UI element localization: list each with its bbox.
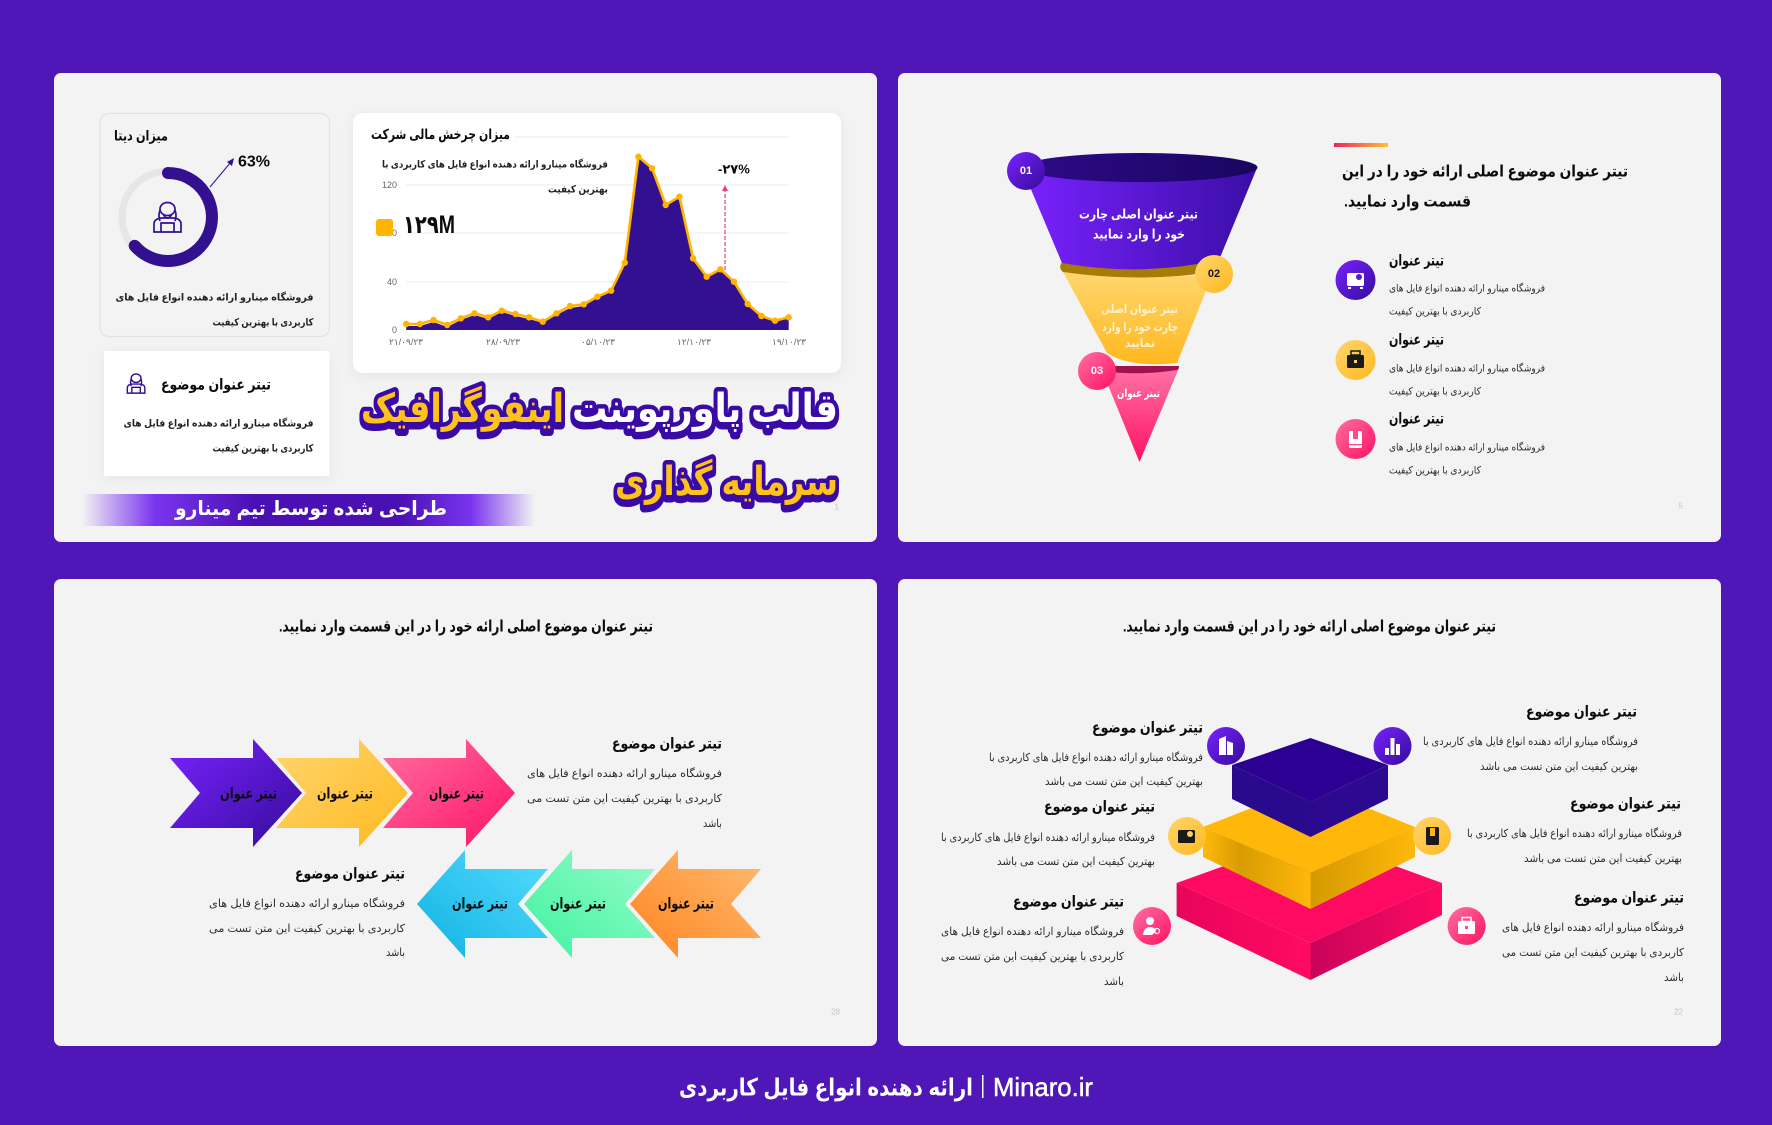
panel: layered blocks slide — [898, 579, 1721, 1046]
arrow: orange — [630, 850, 761, 958]
badge 02 — [1195, 255, 1233, 293]
line series with markers — [403, 154, 792, 328]
text block: right — [527, 736, 723, 830]
list item 1: فروشگاه مینارو ارائه دهنده انواع فایل های — [1389, 282, 1545, 294]
layer: purple — [1232, 738, 1388, 837]
text block: bottom right: تیتر عنوان موضوع — [1574, 890, 1684, 906]
funnel chart — [1007, 152, 1258, 462]
list item 2 — [1336, 332, 1545, 398]
arrow: pink: تیتر عنوان — [429, 786, 484, 802]
text block: top left: تیتر عنوان موضوع — [1092, 720, 1203, 736]
panel: financial dashboard slide — [54, 73, 877, 542]
change label: -۲۷% — [718, 162, 750, 176]
funnel section 3 — [1101, 366, 1179, 462]
text block: middle left: فروشگاه مینارو ارائه دهنده انواع فایل های کاربردی با — [941, 831, 1155, 844]
donut chart 63% — [122, 171, 214, 263]
list item 3: کاربردی با بهترین کیفیت — [1389, 466, 1481, 476]
y axis labels: 0 — [392, 325, 397, 335]
text block: middle left: تیتر عنوان موضوع — [1044, 798, 1155, 816]
text block: right: فروشگاه مینارو ارائه دهنده انواع فایل های — [527, 767, 722, 780]
list item 3: تیتر عنوان — [1389, 410, 1444, 428]
x axis labels: ۱۲/۱۰/۲۳ — [677, 337, 711, 347]
y axis labels: 120 — [382, 180, 397, 190]
text block: middle left: بهترین کیفیت این متن تست می باشد — [997, 856, 1155, 868]
text block: top left: بهترین کیفیت این متن تست می باشد — [1045, 776, 1203, 788]
icon: bar chart — [1374, 727, 1412, 765]
x axis labels — [389, 337, 806, 347]
card: data donut: میزان دیتا — [114, 128, 168, 144]
arrow: yellow: تیتر عنوان — [317, 786, 373, 802]
badge 03: 03 — [1091, 365, 1103, 377]
accent bar — [1334, 143, 1388, 147]
text block: left: تیتر عنوان موضوع — [295, 866, 405, 882]
funnel section 2: نمایید — [1125, 336, 1155, 350]
x axis labels: ۱۹/۱۰/۲۳ — [772, 337, 806, 347]
funnel section 1: تیتر عنوان اصلی چارت — [1079, 206, 1198, 222]
footer: Minaro.ir — [993, 1072, 1093, 1102]
text block: right: کاربردی با بهترین کیفیت این متن تست می — [527, 793, 723, 805]
funnel section 2: تیتر عنوان اصلی — [1101, 302, 1178, 317]
card: area chart: میزان چرخش مالی شرکت — [371, 126, 510, 143]
x axis labels: ۲۸/۰۹/۲۳ — [486, 337, 520, 347]
text block: top left: فروشگاه مینارو ارائه دهنده انواع فایل های کاربردی با — [989, 751, 1203, 764]
list item 3 — [1336, 410, 1545, 476]
card: topic — [104, 351, 330, 476]
arrow: green: تیتر عنوان — [550, 896, 606, 912]
text block: right: باشد — [703, 818, 722, 830]
chart description: فروشگاه مینارو ارائه دهنده انواع فایل های کاربردی با — [382, 158, 608, 170]
chart description: بهترین کیفیت — [548, 184, 608, 196]
main title: سرمایه گذاری — [615, 458, 838, 505]
arrow to value — [210, 158, 234, 187]
funnel section 1: خود را وارد نمایید — [1093, 226, 1185, 242]
text block: top right — [1423, 704, 1638, 773]
card: data donut — [100, 114, 330, 336]
dashed red arrow — [722, 185, 728, 270]
x axis labels: ۲۱/۰۹/۲۳ — [389, 337, 423, 347]
badge 02: 02 — [1208, 268, 1220, 280]
page number: 5 — [1679, 502, 1684, 510]
arrow: orange: تیتر عنوان — [658, 896, 714, 912]
text block: right: تیتر عنوان موضوع — [612, 736, 722, 752]
description — [116, 290, 314, 328]
text block: left: باشد — [386, 947, 405, 959]
text block: left: فروشگاه مینارو ارائه دهنده انواع فایل های — [209, 897, 405, 910]
text block: top left — [989, 720, 1203, 788]
icon: book — [1413, 817, 1451, 855]
page number: 1 — [835, 502, 840, 512]
badge 03 — [1078, 352, 1116, 390]
badge 01: 01 — [1020, 165, 1032, 177]
description — [124, 416, 314, 454]
page number: 22 — [1674, 1008, 1684, 1016]
x axis labels: ۰۵/۱۰/۲۳ — [581, 337, 615, 347]
text block: middle right — [1467, 796, 1682, 865]
funnel section 3: تیتر عنوان — [1117, 388, 1160, 400]
y axis labels — [382, 180, 397, 335]
text block: bottom left: باشد — [1104, 976, 1124, 988]
card: topic: تیتر عنوان موضوع — [161, 376, 271, 394]
list item 1: کاربردی با بهترین کیفیت — [1389, 306, 1481, 318]
card: area chart — [353, 113, 841, 373]
value 63%: 63% — [238, 154, 270, 170]
text block: middle right: فروشگاه مینارو ارائه دهنده انواع فایل های کاربردی با — [1467, 827, 1682, 840]
text block: bottom right: باشد — [1664, 972, 1684, 984]
funnel section 2 — [1060, 262, 1212, 364]
list item 1: تیتر عنوان — [1389, 252, 1444, 270]
icon: projector — [1168, 817, 1206, 855]
y axis labels: 40 — [387, 277, 397, 287]
heading: قسمت وارد نمایید. — [1344, 194, 1471, 210]
icon: building — [1207, 727, 1245, 765]
legend swatch — [376, 219, 393, 236]
main title: اینفوگرافیک — [361, 385, 564, 432]
value 129M: ۱۲۹M — [403, 211, 455, 239]
list item 2: کاربردی با بهترین کیفیت — [1389, 386, 1481, 398]
list item 3: فروشگاه مینارو ارائه دهنده انواع فایل های — [1389, 442, 1545, 454]
description: فروشگاه مینارو ارائه دهنده انواع فایل های — [124, 416, 314, 430]
icon: briefcase — [1448, 907, 1486, 945]
icon: person — [154, 202, 181, 232]
text block: middle left — [941, 798, 1155, 868]
arrow: pink — [383, 739, 515, 847]
text block: bottom left: فروشگاه مینارو ارائه دهنده انواع فایل های — [941, 925, 1124, 938]
arrow: blue — [417, 850, 548, 958]
description: کاربردی با بهترین کیفیت — [212, 444, 314, 454]
text block: bottom left — [941, 894, 1125, 988]
area series — [406, 157, 789, 330]
heading — [1342, 164, 1628, 210]
icon: user search — [1133, 907, 1171, 945]
layer: pink — [1177, 835, 1442, 980]
footer: ارائه دهنده انواع فایل کاربردی — [679, 1074, 973, 1102]
panel: arrows slide — [54, 579, 877, 1046]
designer band: طراحی شده توسط تیم مینارو — [174, 498, 447, 520]
list item 1 — [1336, 252, 1545, 318]
arrow: purple: تیتر عنوان — [220, 786, 277, 802]
list item 2: تیتر عنوان — [1389, 332, 1444, 348]
chart description — [382, 158, 608, 196]
text block: bottom right: کاربردی با بهترین کیفیت این متن تست می — [1502, 947, 1685, 959]
page number: 28 — [831, 1008, 841, 1016]
arrow: blue: تیتر عنوان — [452, 896, 508, 912]
main title — [361, 385, 838, 505]
heading: تیتر عنوان موضوع اصلی ارائه خود را در این — [1342, 164, 1628, 180]
arrow: green — [524, 850, 655, 958]
designer band — [82, 494, 535, 526]
text block: bottom left: کاربردی با بهترین کیفیت این متن تست می — [941, 951, 1125, 963]
icon: person small — [127, 374, 145, 393]
panel: funnel slide — [898, 73, 1721, 542]
list item 2: فروشگاه مینارو ارائه دهنده انواع فایل های — [1389, 362, 1545, 374]
text block: top right: تیتر عنوان موضوع — [1526, 704, 1637, 720]
description: کاربردی با بهترین کیفیت — [212, 318, 314, 328]
text block: bottom left: تیتر عنوان موضوع — [1013, 894, 1124, 910]
arrow: yellow — [276, 739, 408, 847]
text block: left: کاربردی با بهترین کیفیت این متن تست می — [209, 923, 406, 935]
text block: middle right: بهترین کیفیت این متن تست می باشد — [1524, 853, 1682, 865]
badge 01 — [1007, 152, 1045, 190]
description: فروشگاه مینارو ارائه دهنده انواع فایل های — [116, 290, 314, 304]
heading: تیتر عنوان موضوع اصلی ارائه خود را در این قسمت وارد نمایید. — [279, 618, 653, 636]
text block: middle right: تیتر عنوان موضوع — [1570, 796, 1681, 812]
text block: top right: بهترین کیفیت این متن تست می باشد — [1480, 761, 1638, 773]
text block: left — [209, 866, 406, 959]
text block: top right: فروشگاه مینارو ارائه دهنده انواع فایل های کاربردی با — [1423, 735, 1638, 748]
arrow: purple — [170, 739, 302, 847]
funnel section 2: چارت خود را وارد — [1102, 320, 1178, 335]
layer: yellow — [1203, 785, 1415, 909]
main title: قالب پاورپوینت — [572, 387, 838, 432]
text block: bottom right — [1502, 890, 1685, 984]
funnel section 1 — [1022, 153, 1258, 269]
text block: bottom right: فروشگاه مینارو ارائه دهنده انواع فایل های — [1502, 921, 1684, 934]
y axis labels: 0 — [392, 228, 397, 238]
heading: تیتر عنوان موضوع اصلی ارائه خود را در این قسمت وارد نمایید. — [1123, 618, 1496, 636]
